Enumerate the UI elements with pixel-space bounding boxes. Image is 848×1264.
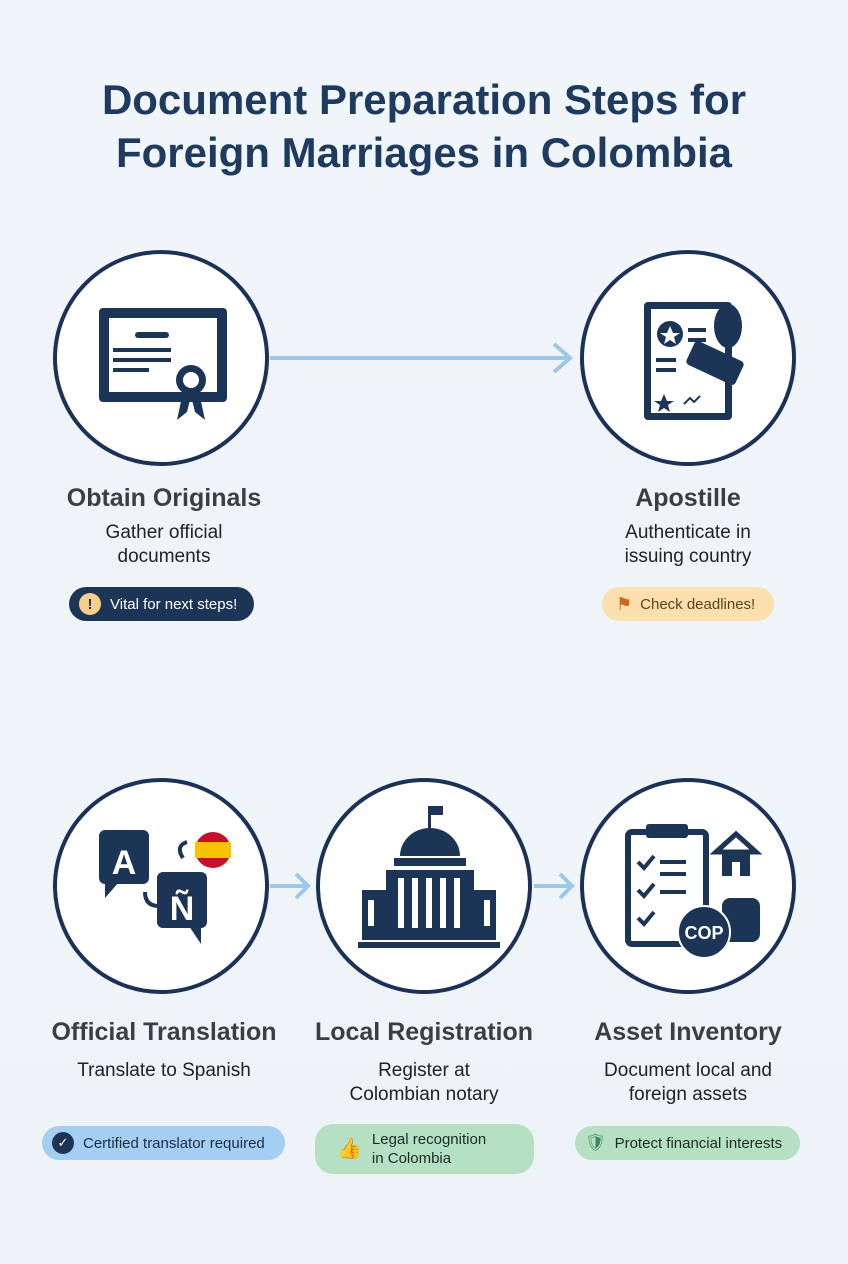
callout: deadlines: Check deadlines! <box>640 596 755 612</box>
description: Gather official <box>106 522 222 543</box>
callout: legal recognition: in Colombia <box>372 1150 451 1167</box>
step: asset inventory <box>575 778 800 1160</box>
icon: translation bubbles <box>53 778 269 994</box>
callout: vital: ! <box>88 596 92 612</box>
callout: certified: Certified translator required <box>83 1134 265 1152</box>
description: issuing country <box>625 546 751 567</box>
step: official translation <box>42 778 285 1160</box>
description <box>350 1060 498 1105</box>
heading: Local Registration <box>315 1018 533 1046</box>
step: local registration <box>315 778 534 1174</box>
step: apostille <box>580 250 796 621</box>
description <box>604 1060 772 1105</box>
heading: Obtain Originals <box>67 484 261 512</box>
description: foreign assets <box>629 1084 747 1105</box>
icon: stamped document <box>580 250 796 466</box>
callout: protect <box>575 1126 800 1160</box>
description: Register at <box>378 1060 470 1081</box>
description <box>625 522 752 567</box>
callout: deadlines: ⚑ <box>616 594 632 614</box>
title: Foreign Marriages in Colombia <box>116 129 732 176</box>
step: obtain originals <box>53 250 269 621</box>
icon: government building <box>316 778 532 994</box>
icon: clipboard house coins: COP <box>684 923 724 943</box>
callout: certified <box>42 1126 285 1160</box>
icon: clipboard house coins <box>580 778 796 994</box>
description: Translate to Spanish <box>77 1060 251 1081</box>
callout: protect: Protect financial interests <box>615 1134 782 1152</box>
callout: vital <box>69 587 254 621</box>
callout: vital: Vital for next steps! <box>110 596 237 612</box>
description: Document local and <box>604 1060 772 1081</box>
description: Colombian notary <box>350 1084 498 1105</box>
callout: legal recognition <box>315 1124 534 1174</box>
description <box>106 522 222 567</box>
description: Authenticate in <box>625 522 751 543</box>
icon: translation bubbles: Ñ <box>170 890 194 928</box>
callout: legal recognition: Legal recognition <box>372 1131 486 1148</box>
arrow: step3 to step4 <box>270 872 311 900</box>
icon: certificate <box>53 250 269 466</box>
heading: Asset Inventory <box>594 1018 782 1046</box>
title: Document Preparation Steps for <box>102 76 746 123</box>
heading: Official Translation <box>51 1018 277 1046</box>
arrow: step4 to step5 <box>534 872 575 900</box>
arrow: step1 to step2 <box>270 342 573 374</box>
description: documents <box>118 546 210 567</box>
heading: Apostille <box>635 484 741 512</box>
callout: deadlines <box>602 587 774 621</box>
callout: legal recognition: 👍 <box>337 1138 362 1160</box>
title <box>102 76 746 176</box>
icon: translation bubbles: A <box>112 844 136 882</box>
callout: certified: ✓ <box>58 1135 68 1150</box>
callout: protect: 🛡 <box>585 1133 607 1152</box>
